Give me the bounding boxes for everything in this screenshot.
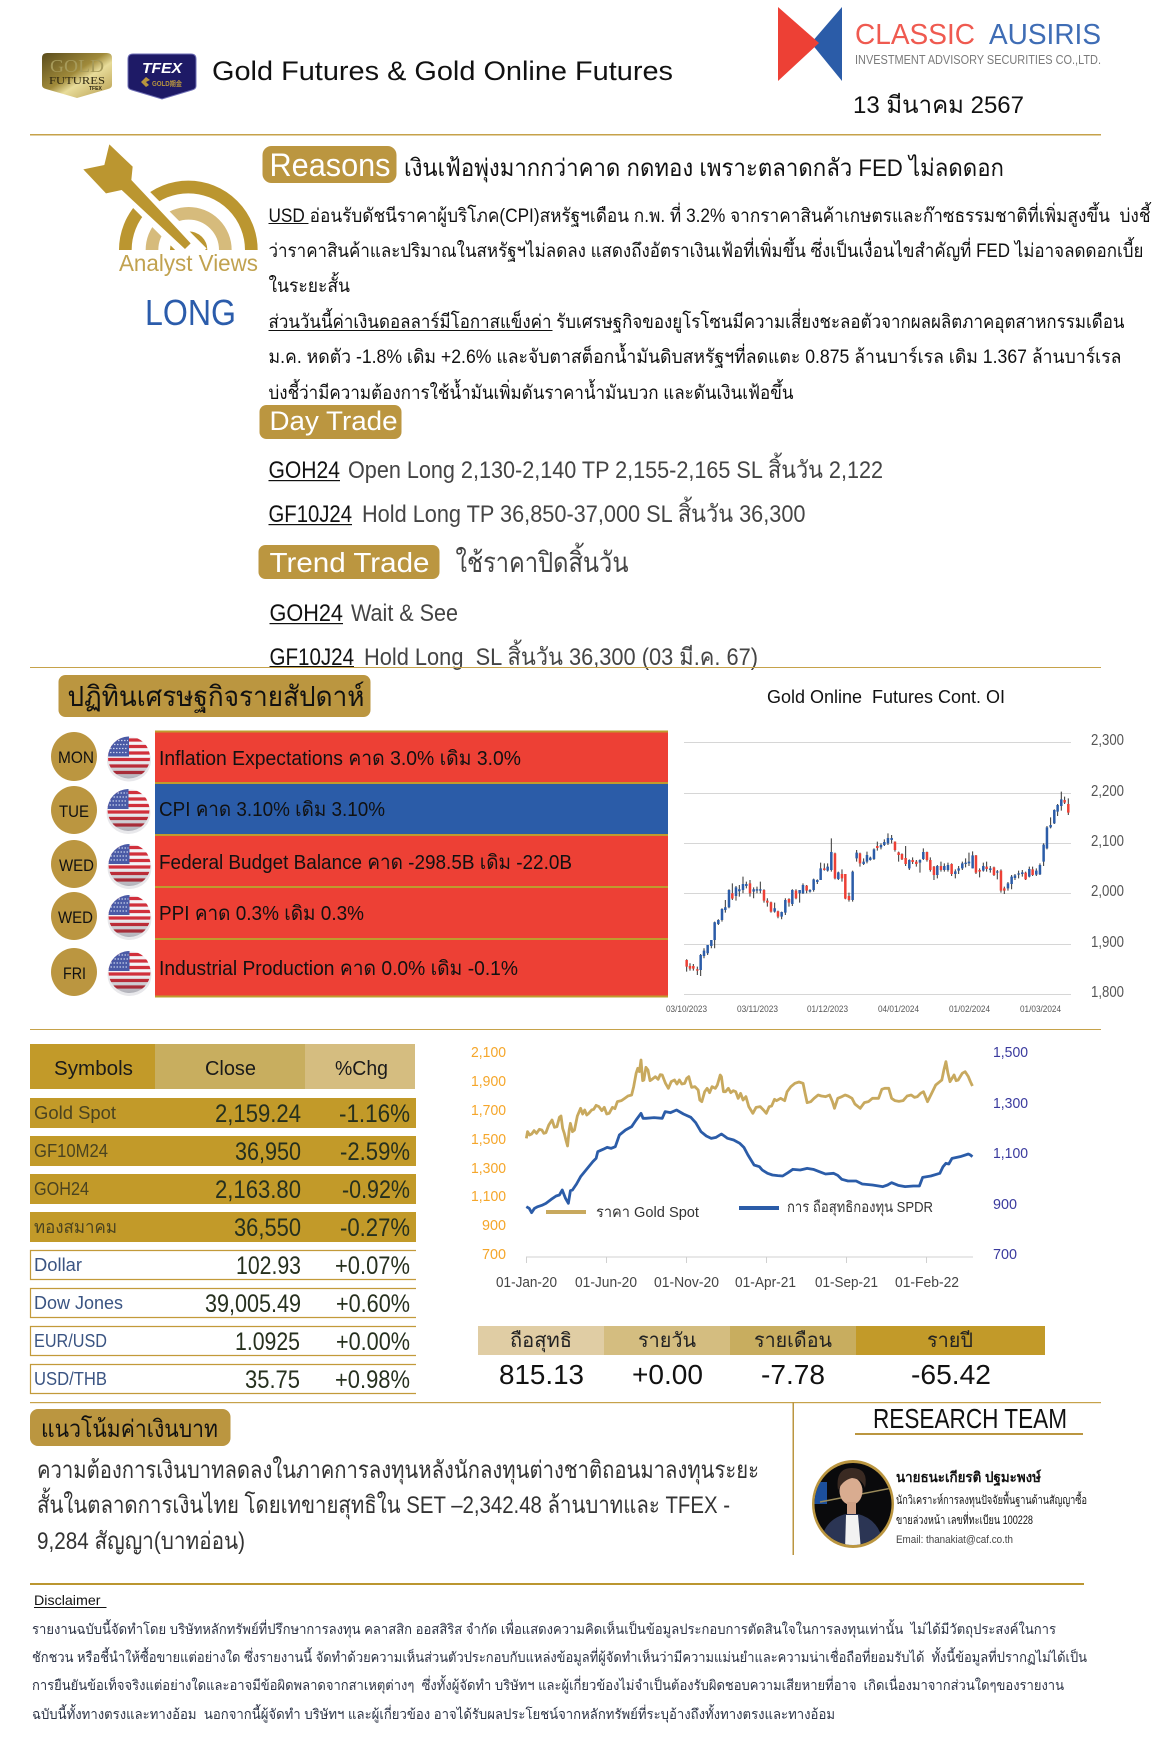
text: trend trade GOH24: Wait & See <box>351 600 458 627</box>
text: trend trade GF10J24: Hold Long SL สิ้นวัน 36,300 (03 มี.ค. 67) <box>364 639 758 671</box>
text: analyst contact: นายธนะเกียรติ ปฐมะพงษ์ <box>896 1469 1041 1487</box>
icon: analyst views target and arrow <box>83 144 258 250</box>
event: industrial production <box>51 939 668 997</box>
heading: economic calendar pill <box>58 675 370 717</box>
heading: trend trade pill: Trend Trade <box>270 547 430 578</box>
label: analyst views: Analyst Views <box>119 250 258 276</box>
legend: SPDR holdings <box>739 1199 933 1217</box>
line chart: gold spot vs SPDR holdings: 900 <box>482 1217 506 1234</box>
candlestick chart: gold online futures: 2,000 <box>1091 883 1124 900</box>
candlestick chart: gold online futures: 2,300 <box>1091 732 1124 749</box>
event: industrial production: Industrial Production คาด 0.0% เดิม -0.1% <box>159 958 518 980</box>
table: SPDR net holdings: -65.42 <box>911 1359 991 1390</box>
table: SPDR net holdings: -7.78 <box>761 1359 825 1390</box>
event: cpi: CPI คาด 3.10% เดิม 3.10% <box>159 799 385 821</box>
icon: gold futures badge <box>42 53 112 98</box>
close values: 36,950 <box>235 1138 301 1166</box>
heading: disclaimer: Disclaimer <box>34 1592 101 1608</box>
table header: %Chg <box>335 1058 388 1080</box>
heading: day trade pill: Day Trade <box>270 406 398 436</box>
close values: 2,159.24 <box>215 1100 301 1128</box>
text block: disclaimer: รายงานฉบับนี้จัดทำโดย บริษัทหลักทรัพย์ที่ปรึกษาการลงทุน คลาสสิก ออสสิริส จำกัด เพื่อแสดงความคิดเห็นเป็นข้อมูลประกอบการตัดสินใจในการลงทุนเท่านั้น ไม่ได้มีวัตถุประสงค์ในการ <box>32 1619 1056 1638</box>
candlestick chart: gold online futures: 03/10/2023 <box>666 1004 707 1015</box>
text: day trade GF10J24: Hold Long TP 36,850-37,000 SL สิ้นวัน 36,300 <box>362 496 806 528</box>
photo: analyst portrait <box>812 1460 894 1548</box>
close values: 36,550 <box>234 1214 301 1242</box>
text block: disclaimer: ชักชวน หรือชี้นำให้ซื้อขายแต่อย่างใด ซึ่งรายงานนี้ จัดทำด้วยความเห็นส่วนตัวประกอบกับแหล่งข้อมูลที่ผู้จัดทำเห็นว่ามีความแม่นยำและความน่าเชื่อถือที่ยอมรับได้ ทั้งนี้ข้อมูลที่ปรากฏไม่ได้เป็น <box>32 1647 1087 1666</box>
table: SPDR net holdings: +0.00 <box>632 1359 703 1390</box>
legend: gold spot <box>546 1204 700 1221</box>
icon: gold futures badge: FUTURES <box>49 75 105 87</box>
event: federal budget balance: WED <box>59 856 94 875</box>
icon: tfex gold online badge <box>128 54 196 99</box>
heading: economic calendar pill: ปฏิทินเศรษฐกิจรายสัปดาห์ <box>68 681 364 713</box>
line chart: gold spot vs SPDR holdings <box>471 1044 1028 1291</box>
text block: disclaimer <box>32 1619 1087 1723</box>
candlestick chart: gold online futures: 1,800 <box>1091 984 1124 1001</box>
table: SPDR net holdings: รายวัน <box>638 1330 696 1352</box>
line chart: gold spot vs SPDR holdings: 01-Jun-20 <box>575 1275 637 1291</box>
text: trend trade GF10J24: GF10J24 <box>270 644 354 671</box>
text: analyst contact <box>896 1469 1087 1546</box>
row labels: Gold Spot <box>34 1103 116 1123</box>
icon: tfex gold online badge: TFEX <box>142 60 183 77</box>
event: federal budget balance: Federal Budget Balance คาด -298.5B เดิม -22.0B <box>159 852 572 874</box>
row labels: Dow Jones <box>34 1293 123 1313</box>
title: Gold Futures & Gold Online Futures <box>212 56 673 86</box>
text: trend trade GF10J24 <box>270 639 758 671</box>
table: SPDR net holdings: 815.13 <box>499 1359 584 1390</box>
text block: analysis paragraph: ในระยะสั้น <box>268 272 350 297</box>
text block: disclaimer: ฉบับนี้ทั้งทางตรงและทางอ้อม นอกจากนี้ผู้จัดทำ บริษัทฯ และผู้เกี่ยวข้อง อาจได้รับผลประโยชน์จากหลักทรัพย์ที่ระบุอ้างถึงทั้งทางตรงและทางอ้อม <box>32 1704 835 1723</box>
table: market symbols <box>30 1044 416 1394</box>
text block: baht outlook: ความต้องการเงินบาทลดลงในภาคการลงทุนหลังนักลงทุนต่างชาติถอนมาลงทุนระยะ <box>37 1456 759 1485</box>
table: SPDR net holdings: รายปี <box>927 1330 973 1352</box>
row backgrounds <box>30 1098 416 1394</box>
line chart: gold spot vs SPDR holdings: 1,700 <box>471 1102 506 1119</box>
text: analyst contact: Email: thanakiat@caf.co.th <box>896 1534 1013 1546</box>
line chart: gold spot vs SPDR holdings: 01-Feb-22 <box>895 1275 959 1291</box>
event: inflation expectations: Inflation Expectations คาด 3.0% เดิม 3.0% <box>159 748 521 770</box>
line chart: gold spot vs SPDR holdings: 1,100 <box>471 1188 506 1205</box>
line chart: gold spot vs SPDR holdings: 1,500 <box>471 1131 506 1148</box>
event: federal budget balance <box>51 835 668 889</box>
text: day trade GF10J24: GF10J24 <box>268 501 352 528</box>
percent change values: -0.27% <box>340 1214 410 1242</box>
table: SPDR net holdings: รายเดือน <box>754 1330 832 1352</box>
legend: SPDR holdings: การ ถือสุทธิกองทุน SPDR <box>787 1199 933 1217</box>
percent change values: +0.07% <box>335 1252 410 1280</box>
table header <box>30 1044 415 1089</box>
line chart: gold spot vs SPDR holdings: 1,500 <box>993 1044 1028 1061</box>
candlestick chart: gold online futures: 1,900 <box>1091 934 1124 951</box>
line chart: gold spot vs SPDR holdings: 01-Jan-20 <box>496 1275 557 1291</box>
event: cpi <box>51 783 668 835</box>
logo: classic ausiris: CLASSIC <box>855 19 975 51</box>
text: analyst contact: นักวิเคราะห์การลงทุนปัจจัยพื้นฐานด้านสัญญาซื้อ <box>896 1491 1087 1508</box>
heading: baht trend pill <box>30 1409 230 1446</box>
text: analyst contact: ขายล่วงหน้า เลขที่ทะเบียน 100228 <box>896 1511 1033 1527</box>
close values: 102.93 <box>236 1252 301 1280</box>
row labels: USD/THB <box>34 1369 107 1389</box>
text: trend trade GOH24: GOH24 <box>270 600 343 627</box>
row labels: Dollar <box>34 1255 82 1275</box>
event: ppi: PPI คาด 0.3% เดิม 0.3% <box>159 903 364 925</box>
table header: Close <box>205 1058 256 1080</box>
text block: baht outlook: สั้นในตลาดการเงินไทย โดยเทขายสุทธิใน SET –2,342.48 ล้านบาทและ TFEX - <box>37 1487 730 1520</box>
text: day trade GOH24 <box>268 452 883 484</box>
line chart: gold spot vs SPDR holdings: 01-Sep-21 <box>815 1275 878 1291</box>
logo: classic ausiris: AUSIRIS <box>989 19 1101 51</box>
event: industrial production: FRI <box>63 964 86 983</box>
line chart: gold spot vs SPDR holdings: 01-Nov-20 <box>654 1275 719 1291</box>
row labels: GOH24 <box>34 1179 89 1199</box>
panel: economic calendar <box>51 731 668 997</box>
close values: 2,163.80 <box>215 1176 301 1204</box>
close values <box>205 1100 301 1394</box>
line chart: gold spot vs SPDR holdings: 900 <box>993 1196 1017 1213</box>
percent change values: -1.16% <box>339 1100 410 1128</box>
text: day trade GOH24: GOH24 <box>268 457 340 484</box>
candlestick chart: gold online futures: 03/11/2023 <box>737 1004 778 1015</box>
line chart: gold spot vs SPDR holdings: 1,300 <box>471 1160 506 1177</box>
row labels: GF10M24 <box>34 1141 108 1161</box>
event: ppi: WED <box>58 908 93 927</box>
row labels: EUR/USD <box>34 1331 107 1351</box>
heading: baht trend pill: แนวโน้มค่าเงินบาท <box>41 1415 218 1443</box>
row labels <box>34 1103 123 1389</box>
candlestick chart: gold online futures: 01/12/2023 <box>807 1004 848 1015</box>
text: day trade GOH24: Open Long 2,130-2,140 TP 2,155-2,165 SL สิ้นวัน 2,122 <box>348 452 883 484</box>
line chart: gold spot vs SPDR holdings: 1,900 <box>471 1073 506 1090</box>
event: ppi <box>51 887 668 940</box>
text block: analysis paragraph: บ่งชี้ว่ามีความต้องการใช้น้ำมันเพิ่มดันราคาน้ำมันบวก และดันเงินเฟ้อขึ้น <box>268 379 794 404</box>
text block: baht outlook: 9,284 สัญญา(บาทอ่อน) <box>37 1528 245 1555</box>
text block: analysis paragraph <box>268 202 1152 404</box>
date: 13 มีนาคม 2567 <box>853 92 1024 119</box>
candlestick chart: gold online futures: 01/02/2024 <box>949 1004 990 1015</box>
candlestick chart: gold online futures: 2,100 <box>1091 833 1124 850</box>
line chart: gold spot vs SPDR holdings: 01-Apr-21 <box>735 1275 796 1291</box>
chart title: Gold Online Futures Cont. OI <box>767 687 1005 707</box>
line chart: gold spot vs SPDR holdings: 700 <box>993 1246 1017 1263</box>
table: SPDR net holdings <box>478 1326 1045 1390</box>
icon: tfex gold online badge: GOLD期金 <box>152 79 182 88</box>
table header: Symbols <box>54 1058 133 1080</box>
text block: baht outlook <box>37 1456 759 1555</box>
icon: gold futures badge: TFEX <box>89 86 102 92</box>
candlestick chart: gold online futures: 04/01/2024 <box>878 1004 919 1015</box>
text: trend trade note: ใช้ราคาปิดสิ้นวัน <box>456 542 628 578</box>
icon: gold futures badge: GOLD <box>50 56 104 76</box>
event: inflation expectations <box>51 731 668 783</box>
close values: 1.0925 <box>235 1328 300 1356</box>
line chart: gold spot vs SPDR holdings: 2,100 <box>471 1044 506 1061</box>
close values: 35.75 <box>245 1366 300 1394</box>
text block: disclaimer: การยืนยันข้อเท็จจริงแต่อย่างใดและอาจมีข้อผิดพลาดจากสาเหตุต่างๆ ซึ่งทั้งผู้จัดทำ บริษัทฯ และผู้เกี่ยวข้องไม่จำเป็นต้องรับผิดชอบความเสียหายที่อาจ เกิดเนื่องมาจากส่วนใดๆของรายงาน <box>32 1675 1064 1694</box>
close values: 39,005.49 <box>205 1290 301 1318</box>
candlestick chart: gold online futures <box>666 732 1124 1015</box>
text: day trade GF10J24 <box>268 496 806 528</box>
event: cpi: TUE <box>59 802 89 821</box>
text: trend trade GOH24 <box>270 600 458 627</box>
logo: classic ausiris: INVESTMENT ADVISORY SECURITIES CO.,LTD. <box>855 53 1101 67</box>
line chart: gold spot vs SPDR holdings: 1,100 <box>993 1145 1028 1162</box>
logo: classic ausiris <box>778 7 1101 81</box>
table: SPDR net holdings: ถือสุทธิ <box>510 1330 572 1353</box>
label: long signal: LONG <box>145 292 236 333</box>
percent change values: -2.59% <box>340 1138 410 1166</box>
heading: research team: RESEARCH TEAM <box>873 1403 1067 1434</box>
percent change values: +0.98% <box>335 1366 410 1394</box>
line chart: gold spot vs SPDR holdings: 700 <box>482 1246 506 1263</box>
heading: reasons pill: Reasons <box>270 147 390 183</box>
candlestick chart: gold online futures: 2,200 <box>1091 783 1124 800</box>
legend: gold spot: ราคา Gold Spot <box>596 1204 700 1221</box>
percent change values: +0.60% <box>336 1290 410 1318</box>
percent change values <box>335 1100 410 1394</box>
candlestick chart: gold online futures: 01/03/2024 <box>1020 1004 1061 1015</box>
headline: เงินเฟ้อพุ่งมากกว่าคาด กดทอง เพราะตลาดกลัว FED ไม่ลดดอก <box>404 154 1004 183</box>
percent change values: -0.92% <box>342 1176 410 1204</box>
event: inflation expectations: MON <box>58 748 94 767</box>
line chart: gold spot vs SPDR holdings: 1,300 <box>993 1095 1028 1112</box>
percent change values: +0.00% <box>336 1328 410 1356</box>
row labels: ทองสมาคม <box>34 1217 117 1237</box>
